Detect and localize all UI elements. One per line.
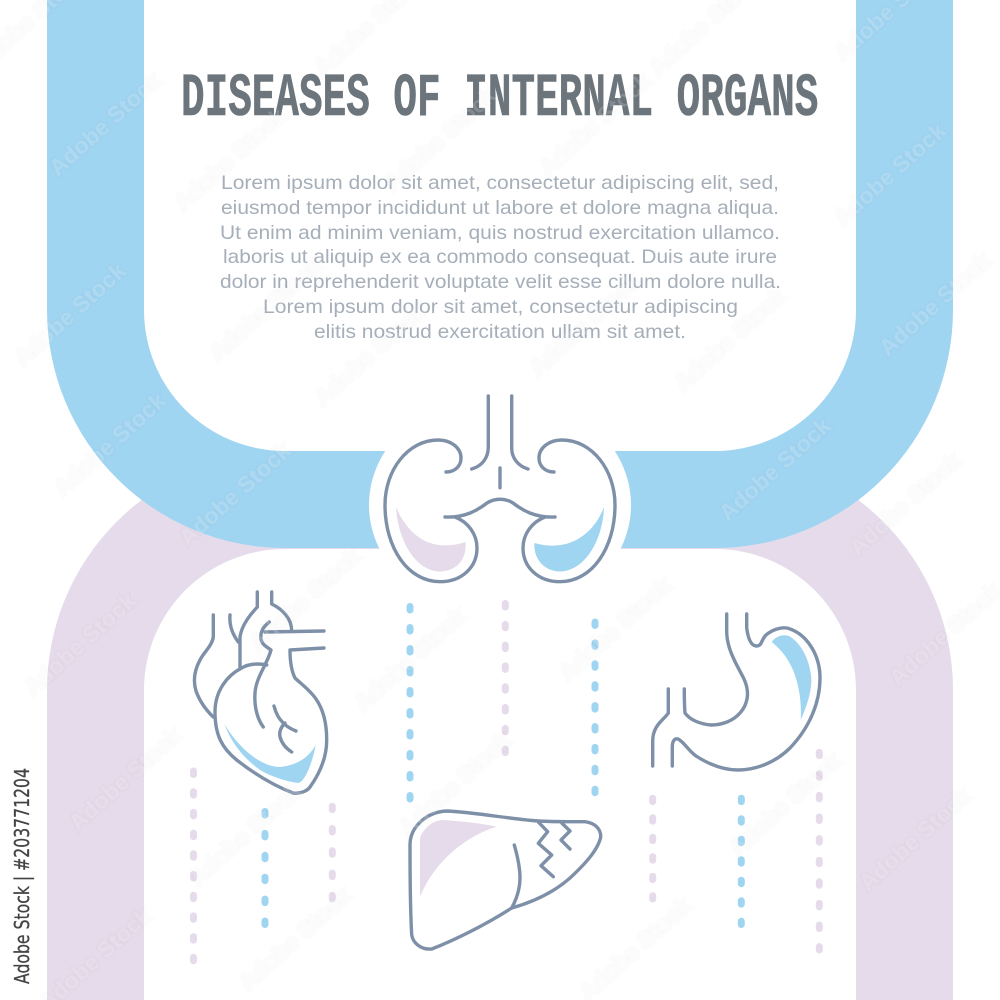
stock watermark pattern: Adobe Stock (204, 252, 326, 366)
heart shading (224, 724, 316, 783)
stock watermark pattern: Adobe Stock (844, 447, 966, 561)
right lung shading (534, 507, 604, 572)
left lung shading (396, 507, 466, 572)
stomach shading (772, 635, 811, 720)
body text block: elitis nostrud exercitation ullam sit amet. (314, 321, 686, 343)
stock watermark pattern: Adobe Stock (244, 542, 366, 656)
dotted lines: lungs (410, 604, 595, 799)
body text block: eiusmod tempor incididunt ut labore et dolore magna aliqua. (221, 197, 779, 219)
stock watermark pattern: Adobe Stock (854, 782, 976, 896)
stock watermark pattern: Adobe Stock (309, 297, 431, 411)
purple arch band (47, 452, 953, 1000)
white ellipse behind lungs icon (369, 393, 631, 617)
body text block: Lorem ipsum dolor sit amet, consectetur adipiscing (263, 296, 738, 318)
liver shading (420, 820, 497, 897)
stock watermark pattern: Adobe Stock (874, 247, 996, 361)
stock watermark pattern: Adobe Stock (64, 722, 186, 836)
dotted lines: stomach (653, 752, 819, 950)
icon: lungs (385, 396, 615, 582)
stock watermark pattern: Adobe Stock (174, 437, 296, 551)
icon: heart (194, 592, 327, 793)
stock watermark pattern: Adobe Stock (534, 67, 656, 181)
stock watermark pattern: Adobe Stock (44, 67, 166, 181)
body text block: laboris ut aliquip ex ea commodo consequat. Duis aute irure (223, 246, 777, 268)
stock watermark pattern: Adobe Stock (829, 117, 951, 231)
stock watermark pattern: Adobe Stock (714, 412, 836, 526)
stock watermark pattern: Adobe Stock (184, 777, 306, 891)
body text block: Lorem ipsum dolor sit amet, consectetur adipiscing elit, sed, (221, 172, 779, 194)
stock watermark pattern: Adobe Stock (724, 747, 846, 861)
heart outline (194, 592, 327, 793)
blue U band (47, 0, 953, 548)
stock watermark pattern: Adobe Stock (524, 267, 646, 381)
stock watermark pattern: Adobe Stock (9, 257, 131, 371)
lungs outline (385, 396, 615, 582)
icon: stomach (653, 614, 820, 770)
stock id text: Adobe Stock | #203771204 (10, 768, 34, 984)
stock watermark pattern: Adobe Stock (394, 727, 516, 841)
liver outline (410, 811, 601, 949)
dotted lines: heart (194, 771, 332, 961)
title: DISEASES OF INTERNAL ORGANS (181, 65, 818, 134)
stock watermark pattern: Adobe Stock (234, 882, 356, 996)
body text block: dolor in reprehenderit voluptate velit esse cillum dolore nulla. (220, 271, 781, 293)
stock watermark pattern: Adobe Stock (19, 587, 141, 701)
stock watermark pattern: Adobe Stock (49, 387, 171, 501)
stomach outline (653, 614, 820, 770)
body text block (220, 172, 781, 343)
stock watermark pattern: Adobe Stock (669, 282, 791, 396)
stock watermark pattern: Adobe Stock (554, 572, 676, 686)
icon: liver (410, 811, 601, 949)
stock watermark pattern: Adobe Stock (349, 602, 471, 716)
stock watermark pattern: Adobe Stock (379, 82, 501, 196)
body text block: Ut enim ad minim veniam, quis nostrud exercitation ullamco. (220, 222, 780, 244)
stock watermark pattern: Adobe Stock (169, 102, 291, 216)
